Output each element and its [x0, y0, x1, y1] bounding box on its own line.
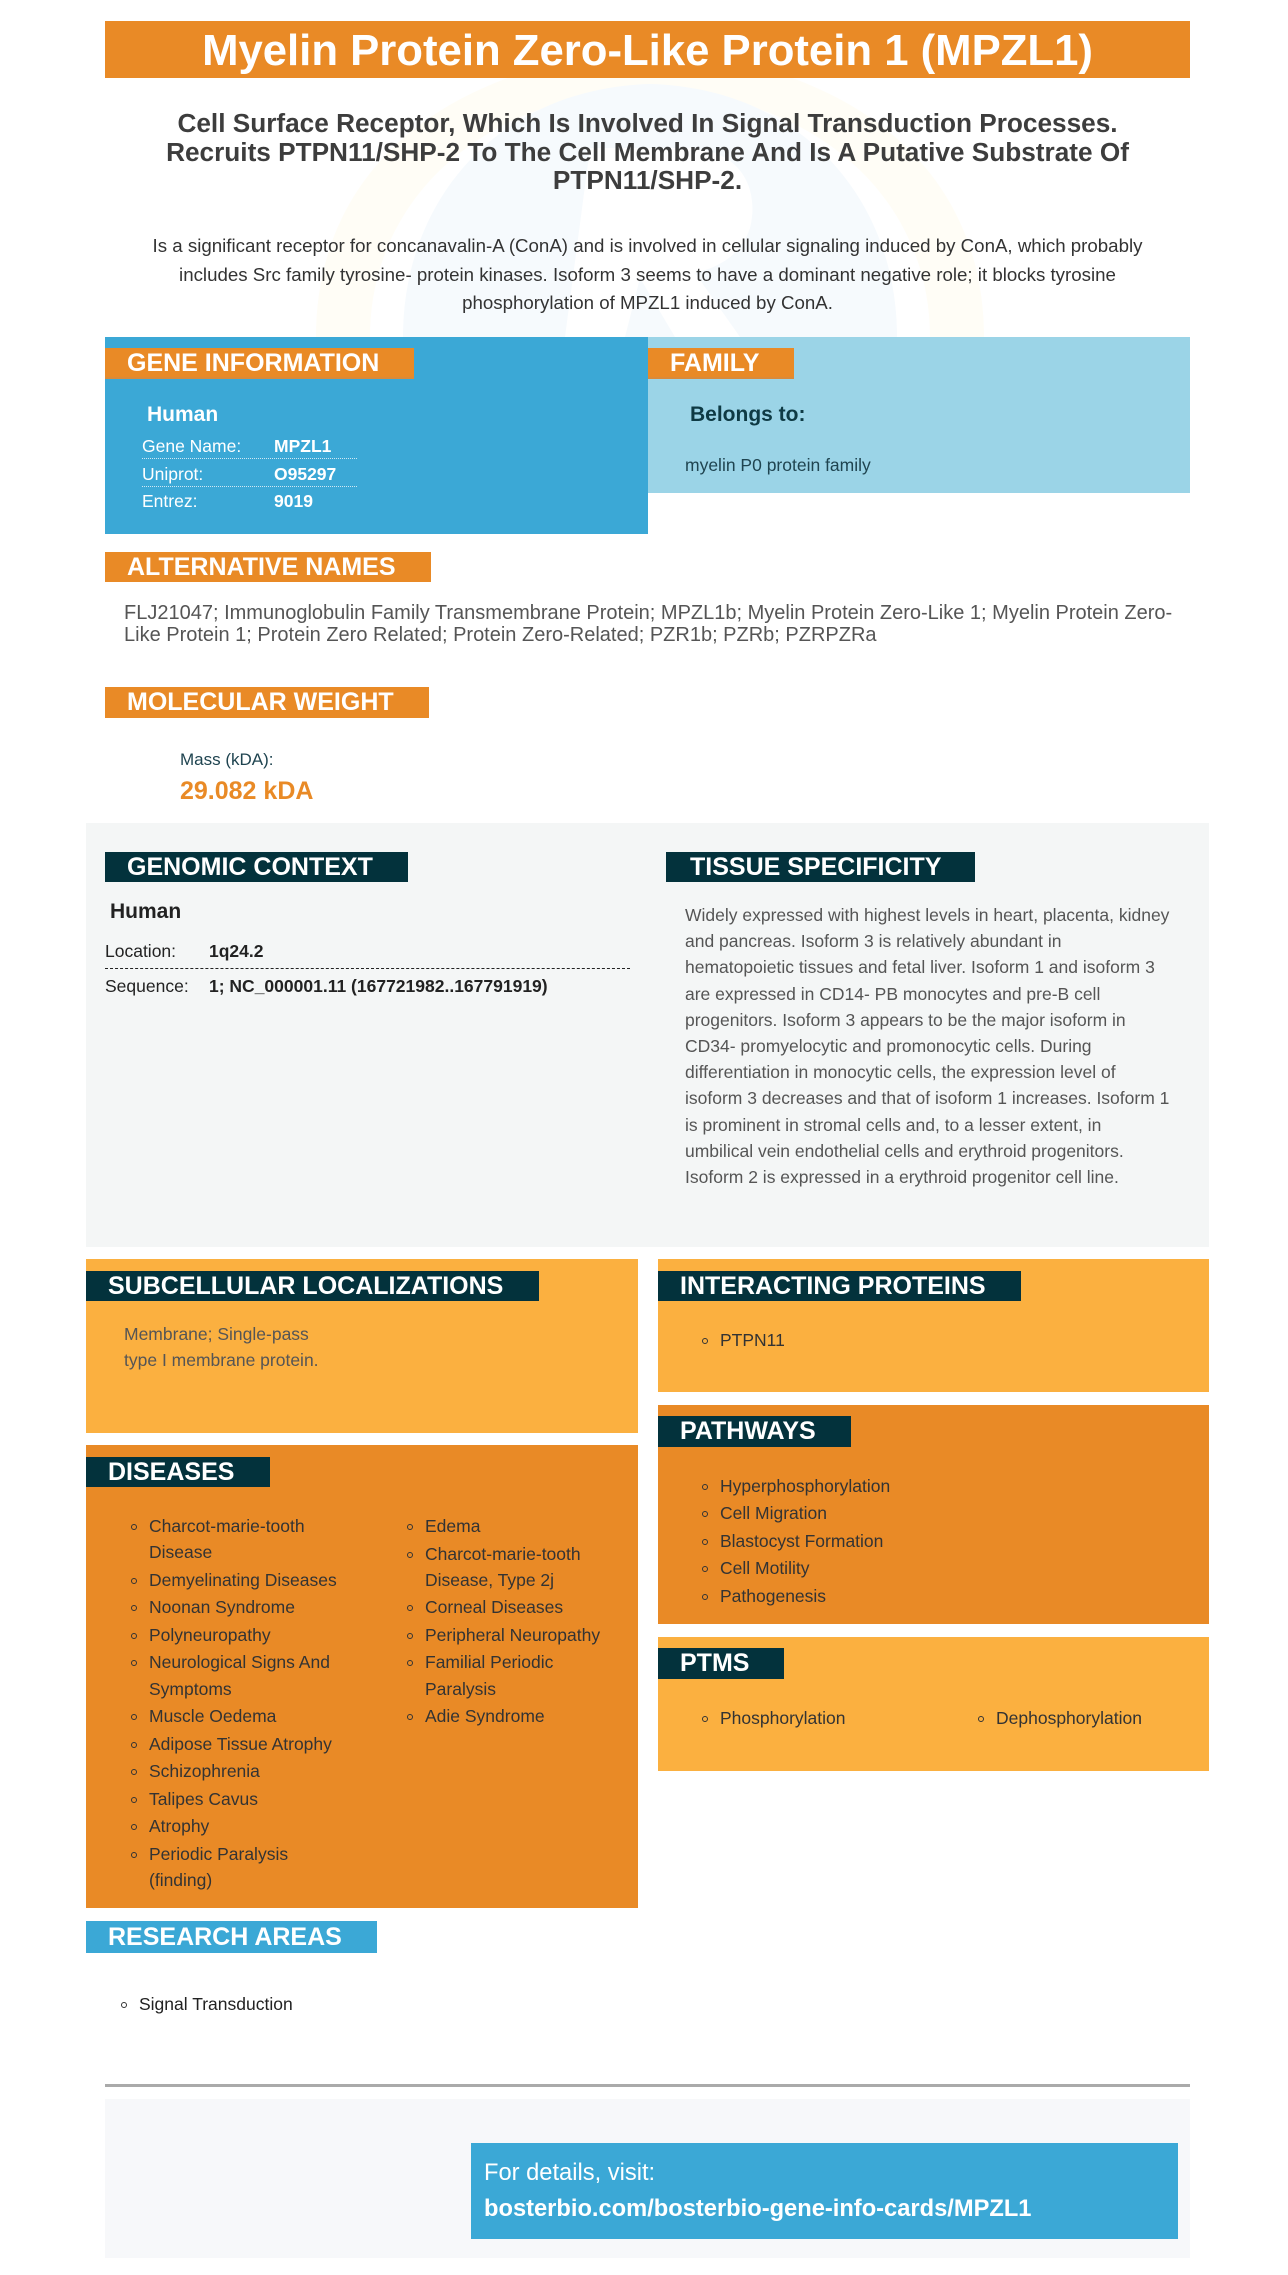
subtitle: Cell Surface Receptor, Which Is Involved In Signal Transduction Processes. — [177, 108, 1118, 138]
panel: family — [648, 337, 1190, 493]
panel: interacting proteins — [658, 1259, 1209, 1392]
tissue specificity text: is prominent in stromal cells and, to a lesser extent, in — [685, 1115, 1101, 1135]
pathway list — [702, 1476, 890, 1606]
alternative names text: Like Protein 1; Protein Zero Related; Protein Zero-Related; PZR1b; PZRb; PZRPZRa — [124, 624, 877, 646]
uniprot row: O95297 — [274, 464, 336, 484]
entrez row: 9019 — [274, 491, 313, 511]
callout label: For details, visit: — [484, 2160, 655, 2186]
panel: footer — [105, 2099, 1190, 2258]
disease list: column 1: Periodic Paralysis — [149, 1844, 288, 1864]
localization text — [124, 1324, 319, 1370]
disease list: column 1: Muscle Oedema — [149, 1706, 276, 1726]
pathway list: Blastocyst Formation — [720, 1531, 883, 1551]
heading: ptms: PTMS — [680, 1649, 749, 1677]
disease list: column 1: Demyelinating Diseases — [149, 1570, 337, 1590]
disease list: column 2: Adie Syndrome — [425, 1706, 545, 1726]
disease list: column 1: Symptoms — [149, 1679, 232, 1699]
heading: interacting proteins: INTERACTING PROTEINS — [680, 1272, 986, 1300]
heading: diseases: DISEASES — [108, 1458, 234, 1486]
family value: myelin P0 protein family — [685, 455, 871, 475]
disease list: column 2: Peripheral Neuropathy — [425, 1625, 600, 1645]
disease list: column 2: Corneal Diseases — [425, 1597, 563, 1617]
disease list: column 2: Familial Periodic — [425, 1652, 553, 1672]
title: Myelin Protein Zero-Like Protein 1 (MPZL1) — [202, 26, 1093, 75]
disease list: column 1: Atrophy — [149, 1816, 209, 1836]
pathway list: Pathogenesis — [720, 1586, 826, 1606]
species label: Human — [147, 403, 218, 426]
gene name row: MPZL1 — [274, 436, 331, 456]
sequence row: 1; NC_000001.11 (167721982..167791919) — [209, 976, 548, 996]
heading: tissue specificity: TISSUE SPECIFICITY — [690, 853, 941, 881]
tissue specificity text: progenitors. Isoform 3 appears to be the major isoform in — [685, 1010, 1126, 1030]
mass label: Mass (kDA): — [180, 750, 274, 769]
heading: pathways: PATHWAYS — [680, 1417, 816, 1445]
pathway list: Hyperphosphorylation — [720, 1476, 890, 1496]
sequence row: Sequence: — [105, 976, 189, 996]
disease list: column 2 — [407, 1516, 600, 1726]
heading: ptms — [658, 1648, 784, 1679]
heading: molecular weight: MOLECULAR WEIGHT — [127, 688, 394, 716]
alternative names text — [124, 602, 1172, 646]
tissue specificity text: differentiation in monocytic cells, the expression level of — [685, 1062, 1116, 1082]
pathway list: Cell Motility — [720, 1558, 809, 1578]
tissue specificity text: isoform 3 decreases and that of isoform 1 increases. Isoform 1 — [685, 1088, 1169, 1108]
disease list: column 2: Charcot-marie-tooth — [425, 1544, 581, 1564]
heading: alternative names: ALTERNATIVE NAMES — [127, 553, 396, 581]
heading: family: FAMILY — [670, 349, 759, 377]
entrez row — [142, 491, 313, 511]
panel: genomic context and tissue specificity — [86, 823, 1209, 1247]
disease list: column 2: Edema — [425, 1516, 480, 1536]
tissue specificity text — [685, 905, 1170, 1187]
localization text: type I membrane protein. — [124, 1350, 319, 1370]
disease list: column 1: Talipes Cavus — [149, 1789, 258, 1809]
mass value: 29.082 kDA — [180, 777, 313, 805]
uniprot row: Uniprot: — [142, 464, 203, 484]
intro paragraph: Is a significant receptor for concanavalin-A (ConA) and is involved in cellular signaling induced by ConA, which probably — [153, 235, 1142, 256]
disease list: column 2: Disease, Type 2j — [425, 1570, 554, 1590]
heading: family — [648, 348, 794, 379]
protein list item: PTPN11 — [720, 1330, 785, 1350]
uniprot row — [142, 462, 357, 487]
heading: research areas: RESEARCH AREAS — [108, 1923, 342, 1951]
ptm item: dephosphorylation: Dephosphorylation — [996, 1708, 1142, 1728]
heading: gene information: GENE INFORMATION — [127, 349, 379, 377]
disease list: column 1: Neurological Signs And — [149, 1652, 330, 1672]
intro paragraph: phosphorylation of MPZL1 induced by ConA. — [462, 292, 833, 313]
disease list: column 1: Noonan Syndrome — [149, 1597, 295, 1617]
tissue specificity text: Widely expressed with highest levels in heart, placenta, kidney — [685, 905, 1169, 925]
disease list: column 1: Schizophrenia — [149, 1761, 260, 1781]
disease list: column 1: Adipose Tissue Atrophy — [149, 1734, 332, 1754]
callout url: bosterbio.com/bosterbio-gene-info-cards/MPZL1 — [484, 2196, 1031, 2222]
disease list: column 2: Paralysis — [425, 1679, 496, 1699]
footer rule — [105, 2084, 1190, 2087]
heading: subcellular localizations: SUBCELLULAR LOCALIZATIONS — [108, 1272, 503, 1300]
research area item: Signal Transduction — [139, 1994, 293, 2014]
ptm item: phosphorylation: Phosphorylation — [720, 1708, 846, 1728]
gene name row — [142, 434, 357, 459]
belongs to label: Belongs to: — [690, 403, 806, 426]
panel: diseases — [86, 1445, 638, 1908]
panel: pathways — [658, 1405, 1209, 1624]
subtitle: Recruits PTPN11/SHP-2 To The Cell Membrane And Is A Putative Substrate Of — [166, 137, 1129, 167]
entrez row: Entrez: — [142, 491, 197, 511]
heading: diseases — [86, 1457, 270, 1487]
tissue specificity text: hematopoietic tissues and fetal liver. Isoform 1 and isoform 3 — [685, 957, 1155, 977]
disease list: column 1: Disease — [149, 1542, 212, 1562]
location row: Location: — [105, 941, 176, 961]
alternative names text: FLJ21047; Immunoglobulin Family Transmembrane Protein; MPZL1b; Myelin Protein Zero-Like 1; Myelin Protein Zero- — [124, 602, 1172, 624]
tissue specificity text: umbilical vein endothelial cells and erythroid progenitors. — [685, 1141, 1124, 1161]
disease list: column 1: (finding) — [149, 1870, 212, 1890]
gene name row: Gene Name: — [142, 436, 241, 456]
tissue specificity text: and pancreas. Isoform 3 is relatively abundant in — [685, 931, 1061, 951]
subtitle — [166, 108, 1130, 195]
tissue specificity text: Isoform 2 is expressed in a erythroid progenitor cell line. — [685, 1167, 1119, 1187]
panel: ptms — [658, 1637, 1209, 1771]
panel: gene information — [105, 337, 648, 534]
intro paragraph: includes Src family tyrosine- protein kinases. Isoform 3 seems to have a dominant negative role; it blocks tyrosine — [179, 264, 1116, 284]
panel: subcellular localizations — [86, 1259, 638, 1433]
localization text: Membrane; Single-pass — [124, 1324, 309, 1344]
callout: details link — [471, 2143, 1178, 2239]
heading: pathways — [658, 1416, 851, 1447]
location row: 1q24.2 — [209, 941, 263, 961]
location row — [105, 939, 630, 969]
disease list: column 1: Charcot-marie-tooth — [149, 1516, 305, 1536]
tissue specificity text: are expressed in CD14- PB monocytes and pre-B cell — [685, 984, 1100, 1004]
disease list: column 1 — [131, 1516, 337, 1890]
molecular weight value — [180, 750, 313, 805]
subtitle: PTPN11/SHP-2. — [553, 165, 742, 195]
watermark logo — [316, 78, 984, 337]
heading: genomic context: GENOMIC CONTEXT — [127, 853, 373, 881]
species label: Human — [110, 900, 181, 923]
intro paragraph — [153, 235, 1142, 313]
disease list: column 1: Polyneuropathy — [149, 1625, 271, 1645]
tissue specificity text: CD34- promyelocytic and promonocytic cells. During — [685, 1036, 1092, 1056]
pathway list: Cell Migration — [720, 1503, 827, 1523]
